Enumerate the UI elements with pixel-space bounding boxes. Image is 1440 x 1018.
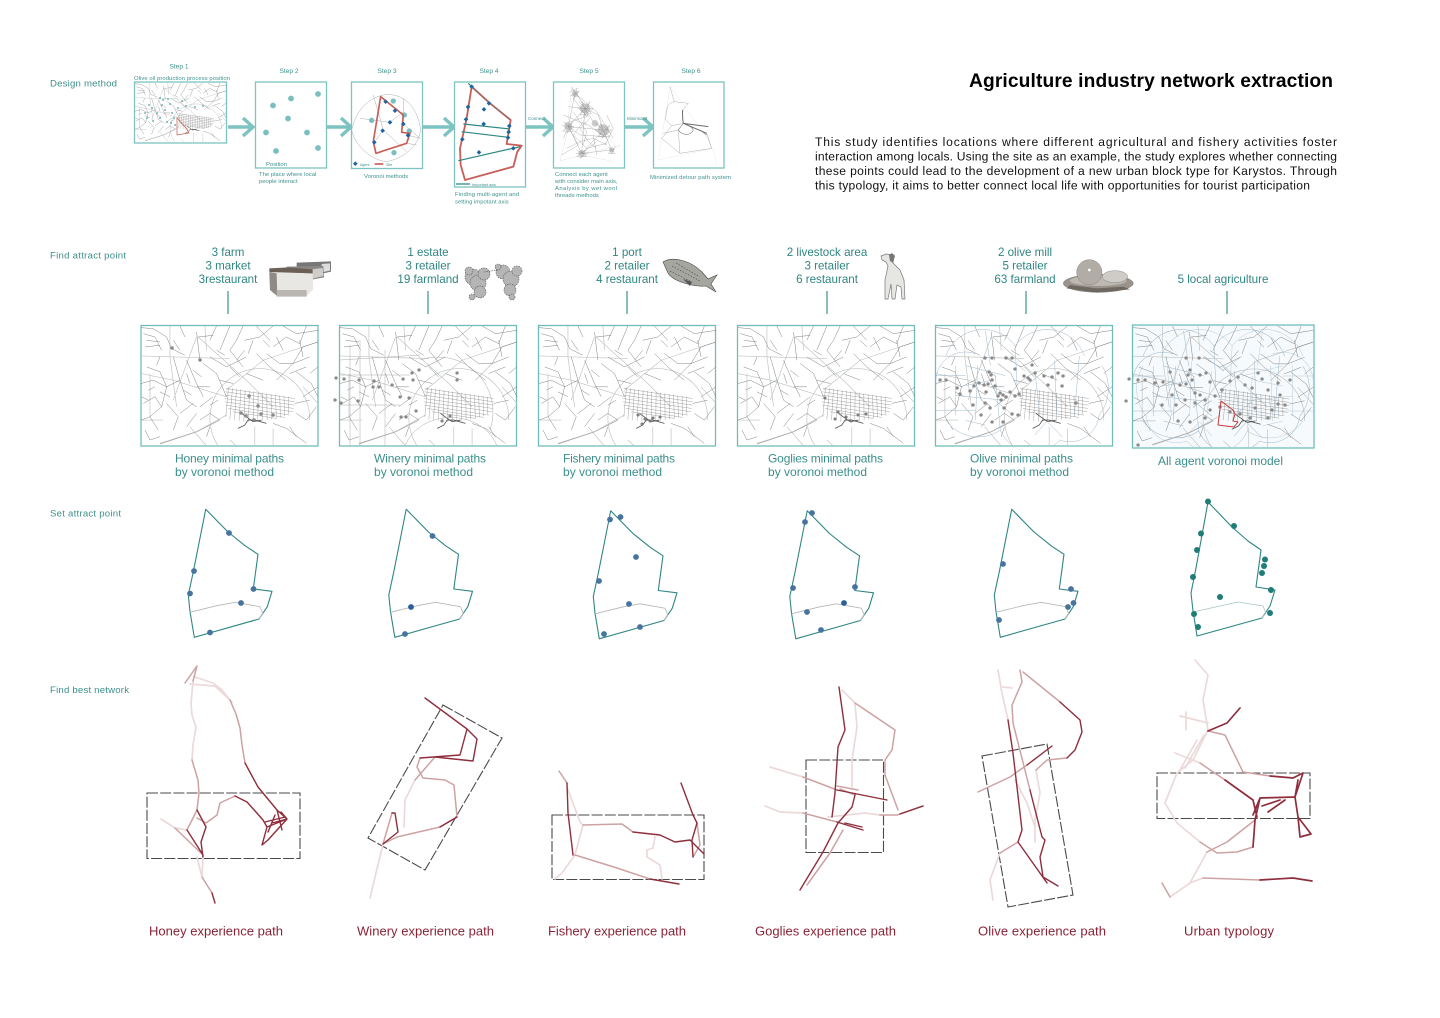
icon: fish	[663, 259, 717, 292]
caption: olive	[970, 452, 1073, 479]
intro paragraph: This study identifies locations where different agricultural and fishery activities foster	[815, 135, 1337, 149]
panel: olive voronoi map	[936, 326, 1112, 452]
panel: step 5 wet wool threads: Connect each agent	[555, 172, 608, 178]
panel: step 3 voronoi	[352, 68, 422, 180]
caption: goglies	[768, 452, 883, 479]
caption: olive: Olive minimal paths	[970, 452, 1073, 466]
arrow: step 5 to step 6	[625, 116, 653, 136]
panel: step 1 olive production map: Step 1	[169, 64, 189, 70]
panel: step 4 multi-agent axes: Step 4	[479, 68, 499, 75]
header: goglies counts: 6 restaurant	[796, 273, 859, 286]
header: fishery counts: 1 port	[612, 246, 643, 259]
panel: step 2 positions: Position	[266, 162, 287, 168]
header: winery counts	[397, 246, 459, 314]
panel: step 2 positions: people interact	[259, 179, 298, 185]
network: goglies experience path	[765, 687, 923, 890]
label: honey experience path: Honey experience path	[149, 924, 283, 938]
panel: step 3 voronoi: Site	[386, 163, 392, 167]
arrow: step 4 to step 5: Connect	[528, 116, 546, 121]
panel: step 6 minimized path	[650, 68, 731, 181]
header: goglies counts: 2 livestock area	[787, 246, 868, 259]
label: olive experience path: Olive experience path	[978, 924, 1106, 938]
panel: step 3 voronoi: Agent	[360, 163, 369, 167]
row heading: find best network: Find best network	[50, 685, 129, 696]
panel: goglies voronoi map	[738, 326, 915, 446]
network: urban typology	[1157, 660, 1312, 897]
header: olive counts: 2 olive mill	[998, 246, 1052, 259]
panel: step 5 wet wool threads: with consider main axis,	[554, 179, 618, 185]
header: all agriculture: 5 local agriculture	[1178, 273, 1268, 286]
header: fishery counts	[596, 246, 659, 314]
caption: honey: Honey minimal paths	[175, 452, 284, 466]
panel: step 4 multi-agent axes	[454, 68, 526, 206]
caption: fishery: Fishery minimal paths	[563, 452, 675, 466]
site outline with goglies attract points	[790, 510, 874, 639]
header: all agriculture	[1178, 273, 1268, 314]
panel: step 1 olive production map	[134, 64, 230, 143]
intro paragraph	[815, 135, 1337, 192]
title: Agriculture industry network extraction	[969, 71, 1333, 92]
panel: step 6 minimized path: Step 6	[681, 68, 701, 75]
row heading: find attract point: Find attract point	[50, 250, 126, 262]
header: olive counts: 5 retailer	[1002, 260, 1048, 272]
header: goglies counts: 3 retailer	[804, 260, 850, 272]
header: fishery counts: 4 restaurant	[596, 273, 659, 286]
header: olive counts: 63 farmland	[994, 273, 1056, 286]
panel: step 1 olive production map: Olive oil production process position	[134, 76, 230, 82]
panel: step 6 minimized path: Minimized detour path system	[650, 175, 731, 181]
label: fishery experience path: Fishery experience path	[548, 924, 686, 938]
caption: honey	[175, 452, 284, 479]
network: honey experience path	[147, 666, 300, 903]
site outline with winery attract points	[389, 509, 472, 637]
caption: goglies: Goglies minimal paths	[768, 452, 883, 466]
panel: step 5 wet wool threads: Analysis by wet wool	[555, 186, 617, 192]
panel: step 2 positions	[256, 68, 326, 185]
arrow: step 4 to step 5	[526, 116, 553, 136]
panel: honey voronoi map	[141, 326, 318, 446]
intro paragraph: interaction among locals. Using the site as an example, the study explores whether connecting	[815, 150, 1337, 164]
panel: step 3 voronoi: Voronoi methods	[364, 174, 408, 180]
icon: grapes	[465, 264, 522, 300]
network: olive experience path	[978, 670, 1082, 907]
header: honey counts	[199, 246, 258, 314]
panel: step 4 multi-agent axes: Important axis	[472, 183, 496, 187]
panel: step 4 multi-agent axes: setting impotant axis	[455, 200, 509, 206]
panel: step 5 wet wool threads: threads methods	[555, 193, 599, 199]
header: fishery counts: 2 retailer	[604, 260, 650, 272]
panel: step 2 positions: Step 2	[279, 68, 299, 75]
panel: winery voronoi map	[335, 326, 517, 446]
label: goglies experience path: Goglies experience path	[755, 924, 896, 938]
network: fishery experience path	[552, 771, 704, 884]
arrow: step 2 to step 3	[327, 118, 351, 136]
header: winery counts: 3 retailer	[405, 260, 451, 272]
label: winery experience path: Winery experience path	[357, 924, 494, 938]
arrow: step 5 to step 6: Minimized	[627, 116, 648, 121]
caption: all agents: All agent voronoi model	[1158, 454, 1283, 468]
panel: step 2 positions: The place where local	[259, 172, 316, 178]
panel: step 3 voronoi: Step 3	[377, 68, 397, 75]
intro paragraph: these points could lead to the development of a new urban block type for Karystos. Through	[815, 164, 1337, 178]
caption: olive: by voronoi method	[970, 465, 1069, 479]
caption: winery: Winery minimal paths	[374, 452, 486, 466]
header: goglies counts	[787, 246, 868, 314]
icon: olive mill	[1063, 260, 1133, 293]
row heading: set attract point: Set attract point	[50, 508, 121, 520]
caption: fishery	[563, 452, 675, 479]
site outline with olive attract points	[994, 509, 1078, 637]
icon: beehive boxes	[269, 261, 331, 297]
panel: step 5 wet wool threads: Step 5	[579, 68, 599, 75]
header: winery counts: 1 estate	[407, 246, 449, 259]
site outline with fishery attract points	[593, 511, 677, 639]
caption: fishery: by voronoi method	[563, 465, 662, 479]
site outline with honey attract points	[187, 509, 272, 637]
header: olive counts	[994, 246, 1056, 314]
panel: step 4 multi-agent axes: Finding multi-agent and	[455, 192, 519, 198]
site outline with all attract points	[1190, 498, 1275, 636]
panel: all agent voronoi map	[1126, 325, 1314, 453]
panel: fishery voronoi map	[538, 326, 716, 446]
intro paragraph: this typology, it aims to better connect local life with opportunities for tourist participation	[815, 178, 1310, 192]
caption: honey: by voronoi method	[175, 465, 274, 479]
arrow: step 3 to step 4	[422, 118, 454, 136]
network: winery experience path	[368, 698, 502, 898]
row heading: design method: Design method	[50, 78, 117, 90]
header: honey counts: 3restaurant	[199, 273, 258, 286]
header: honey counts: 3 farm	[212, 246, 244, 259]
caption: winery: by voronoi method	[374, 465, 473, 479]
panel: step 5 wet wool threads	[554, 68, 624, 199]
icon: goat	[881, 253, 905, 299]
header: honey counts: 3 market	[205, 260, 251, 272]
caption: goglies: by voronoi method	[768, 465, 867, 479]
label: urban typology: Urban typology	[1184, 924, 1274, 938]
arrow: step 1 to step 2	[228, 118, 253, 136]
caption: winery	[374, 452, 486, 479]
header: winery counts: 19 farmland	[397, 273, 459, 286]
